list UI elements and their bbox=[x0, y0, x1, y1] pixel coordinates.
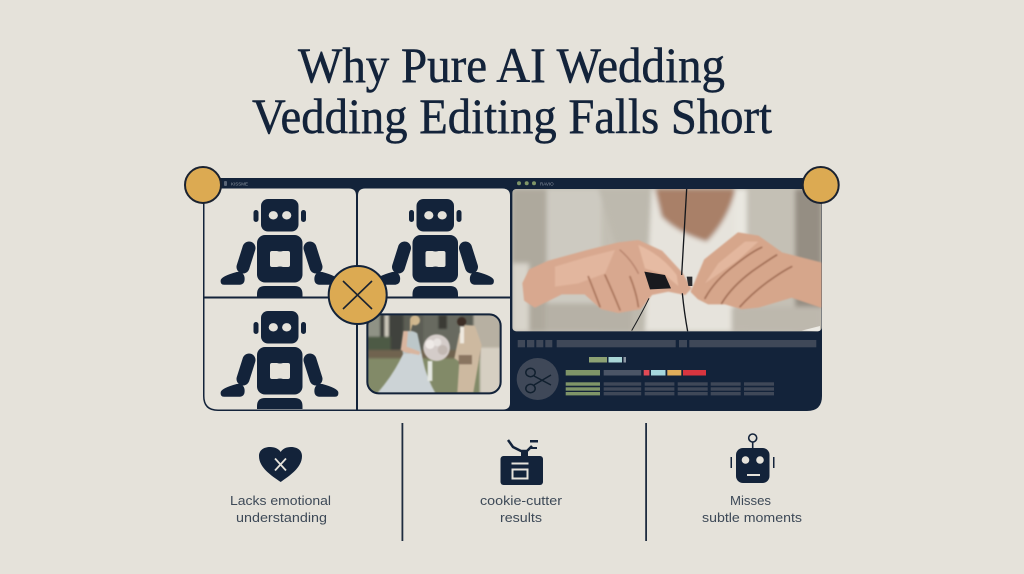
window title bar: left label: KISSME bbox=[231, 181, 248, 186]
window title bar: left label bbox=[224, 181, 248, 186]
title bbox=[252, 37, 772, 144]
text: cookie-cutter results: cookie-cutter bbox=[480, 493, 563, 508]
grid cell: robot top left bbox=[204, 188, 356, 297]
title: Vedding Editing Falls Short bbox=[252, 88, 772, 144]
gold circle: top left bbox=[185, 167, 221, 203]
text: lacks emotional understanding: Lacks emotional bbox=[230, 493, 331, 508]
window frame bbox=[203, 178, 822, 411]
icon: heart with X bbox=[259, 447, 302, 482]
icon: cookie cutter machine bbox=[500, 440, 543, 485]
item: lacks emotional understanding bbox=[230, 447, 331, 525]
text: lacks emotional understanding: understanding bbox=[236, 510, 327, 525]
text: lacks emotional understanding bbox=[230, 493, 331, 525]
timeline: colored clips bbox=[566, 357, 706, 376]
text: misses subtle moments bbox=[702, 493, 803, 525]
text: cookie-cutter results: results bbox=[500, 510, 543, 525]
grid cell: robot top right bbox=[358, 188, 510, 297]
text: misses subtle moments: subtle moments bbox=[702, 510, 803, 525]
control bar: top row bbox=[518, 340, 816, 347]
wedding photo bbox=[367, 314, 501, 393]
text: cookie-cutter results bbox=[480, 493, 563, 525]
panel: robot grid bbox=[204, 188, 510, 410]
window title bar: right dots and label: RAVIO bbox=[540, 181, 554, 186]
timeline: track rows bbox=[566, 382, 774, 395]
panel: video preview of hands bbox=[512, 189, 822, 331]
microphone and cable bbox=[632, 189, 820, 331]
gold circle: top right bbox=[803, 167, 839, 203]
icon: scissors button bbox=[517, 358, 559, 400]
window title bar: right dots and label bbox=[517, 181, 554, 186]
divider bbox=[645, 423, 647, 541]
panel: editor window bbox=[203, 178, 822, 411]
grid cell: robot bottom left bbox=[204, 298, 356, 410]
item: cookie-cutter results bbox=[480, 440, 563, 525]
text: misses subtle moments: Misses bbox=[730, 493, 772, 508]
divider bbox=[402, 423, 403, 541]
item: misses subtle moments bbox=[702, 434, 803, 525]
title: Why Pure AI Wedding bbox=[298, 37, 725, 93]
grid cell: wedding photo bbox=[358, 298, 510, 410]
icon: robot head bbox=[730, 434, 774, 483]
hands bbox=[523, 233, 821, 312]
icon: gold X badge bbox=[329, 266, 387, 324]
